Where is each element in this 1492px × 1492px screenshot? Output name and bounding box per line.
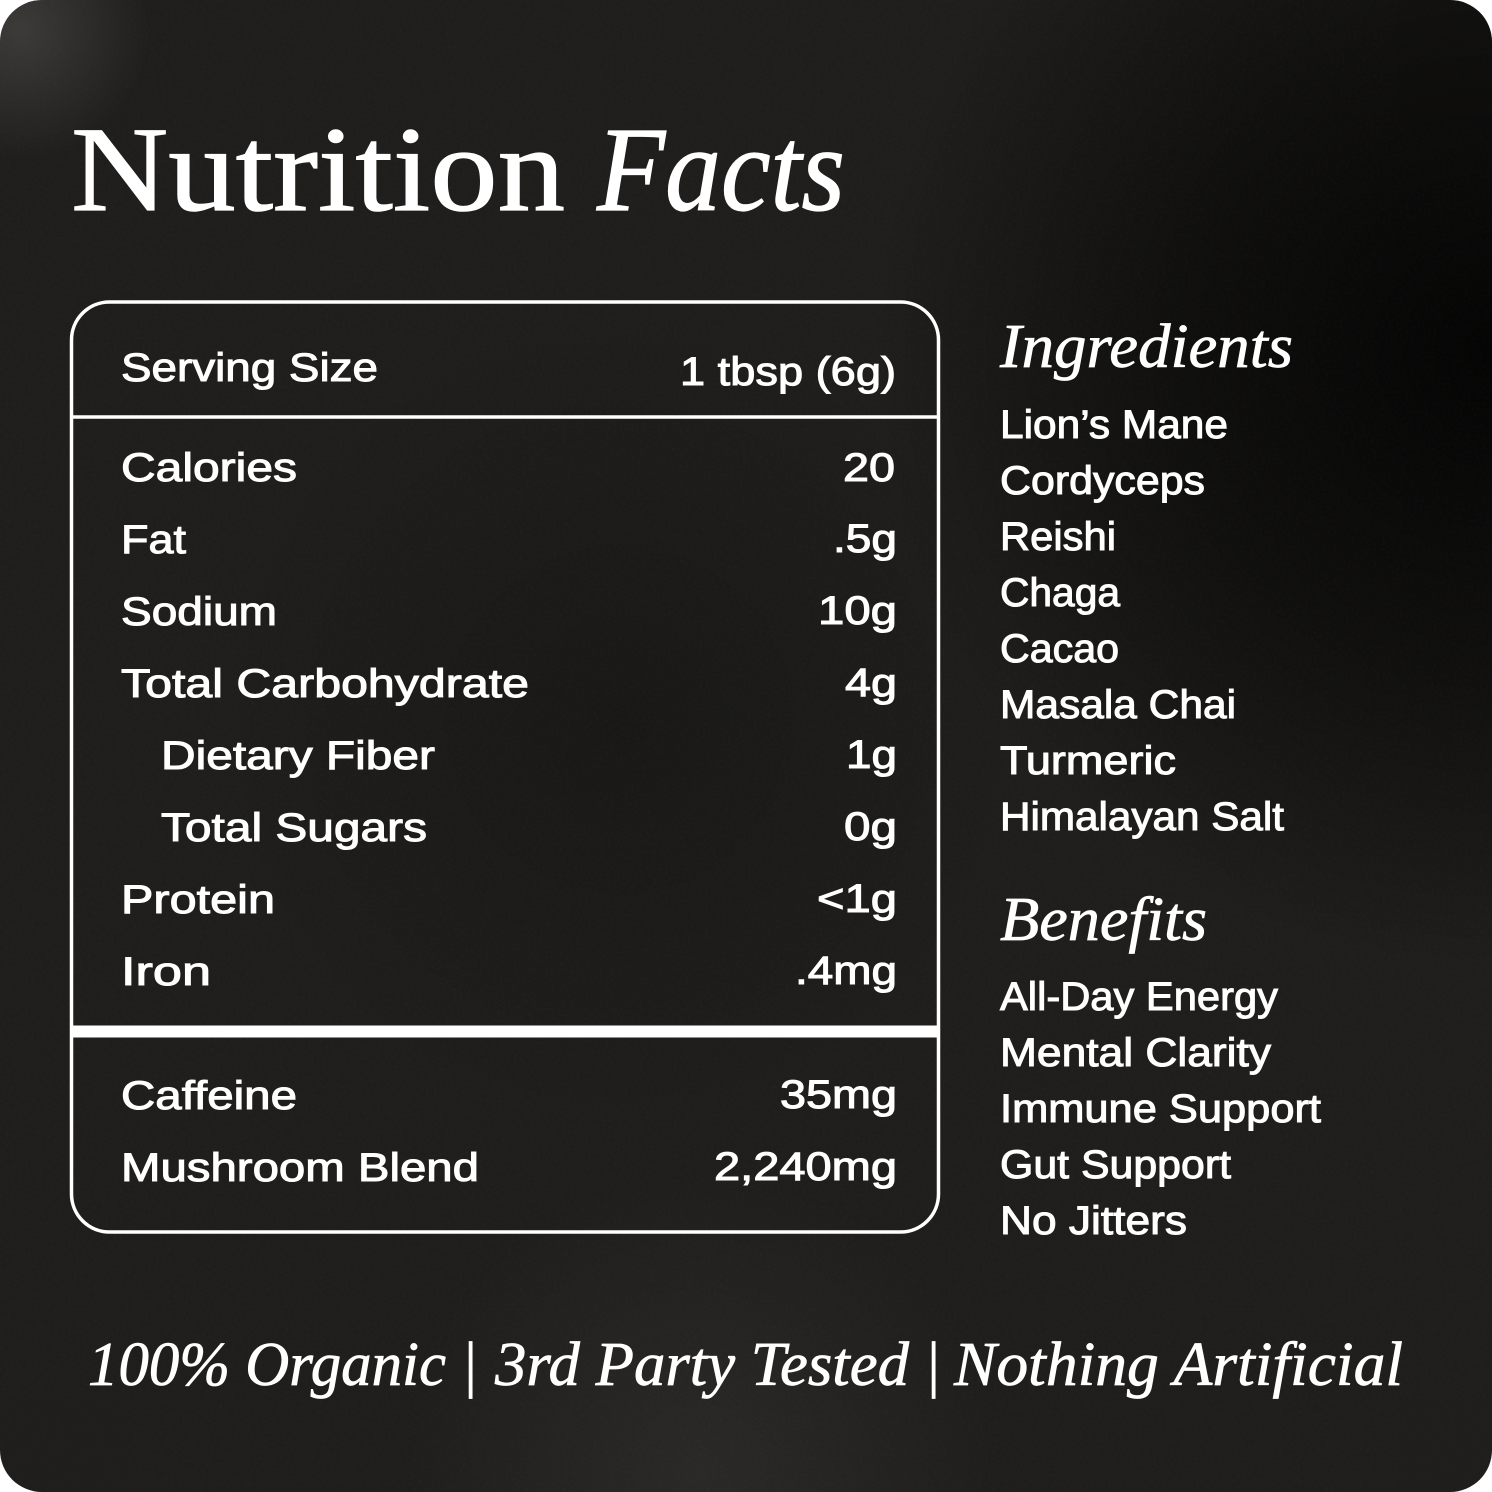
title: Facts (596, 103, 845, 237)
nutrient rows (121, 446, 897, 994)
caffeine and mushroom rows: 35mg (780, 1073, 897, 1117)
nutrient rows: .4mg (795, 949, 897, 993)
ingredients list: Cordyceps (1000, 459, 1205, 503)
ingredients list (1000, 403, 1284, 839)
ingredients column (999, 313, 1293, 839)
nutrient rows: <1g (817, 877, 897, 921)
caffeine and mushroom rows: Caffeine (121, 1074, 297, 1118)
table frame (72, 302, 938, 1232)
ingredients list: Masala Chai (1000, 683, 1236, 727)
caffeine and mushroom rows (121, 1073, 897, 1190)
nutrient rows: 10g (818, 589, 897, 633)
footer tagline: Nothing Artificial (953, 1331, 1403, 1399)
caffeine and mushroom rows: Mushroom Blend (121, 1146, 479, 1190)
benefits list (1000, 975, 1321, 1243)
benefits column (1000, 886, 1321, 1243)
ingredients list: Himalayan Salt (1000, 795, 1284, 839)
serving size row: Serving Size (121, 346, 378, 390)
nutrient rows: 0g (844, 805, 897, 849)
ingredients heading: Ingredients (999, 313, 1293, 381)
nutrient rows: Sodium (121, 590, 277, 634)
benefits list: All-Day Energy (1000, 975, 1278, 1019)
nutrient rows: Fat (121, 518, 186, 562)
nutrient rows: Calories (121, 446, 297, 490)
panel: nutrition table (72, 302, 938, 1232)
footer tagline: 100% Organic (88, 1331, 446, 1399)
title (71, 103, 845, 237)
benefits list: Mental Clarity (1000, 1031, 1271, 1075)
nutrient rows: 1g (846, 733, 897, 777)
nutrient rows: Total Carbohydrate (121, 662, 529, 706)
nutrient rows: Total Sugars (161, 806, 427, 850)
nutrient rows: 20 (843, 446, 895, 490)
ingredients list: Reishi (1000, 515, 1116, 559)
ingredients list: Cacao (1000, 627, 1119, 671)
benefits list: Gut Support (1000, 1143, 1231, 1187)
benefits heading: Benefits (1000, 886, 1207, 954)
benefits list: Immune Support (1000, 1087, 1321, 1131)
nutrient rows: 4g (845, 661, 897, 705)
nutrient rows: .5g (833, 517, 897, 561)
ingredients list: Chaga (1000, 571, 1121, 615)
footer tagline: | (924, 1331, 941, 1399)
ingredients list: Turmeric (1000, 739, 1176, 783)
benefits list: No Jitters (1000, 1199, 1187, 1243)
footer tagline (88, 1331, 1403, 1399)
footer tagline: | (461, 1331, 478, 1399)
footer tagline: 3rd Party Tested (494, 1331, 910, 1399)
nutrient rows: Iron (121, 950, 211, 994)
nutrient rows: Dietary Fiber (161, 734, 435, 778)
ingredients list: Lion’s Mane (1000, 403, 1228, 447)
serving size row (72, 346, 938, 417)
caffeine and mushroom rows: 2,240mg (714, 1145, 897, 1189)
serving size row: 1 tbsp (6g) (680, 350, 896, 394)
nutrient rows: Protein (121, 878, 275, 922)
title: Nutrition (71, 103, 565, 237)
